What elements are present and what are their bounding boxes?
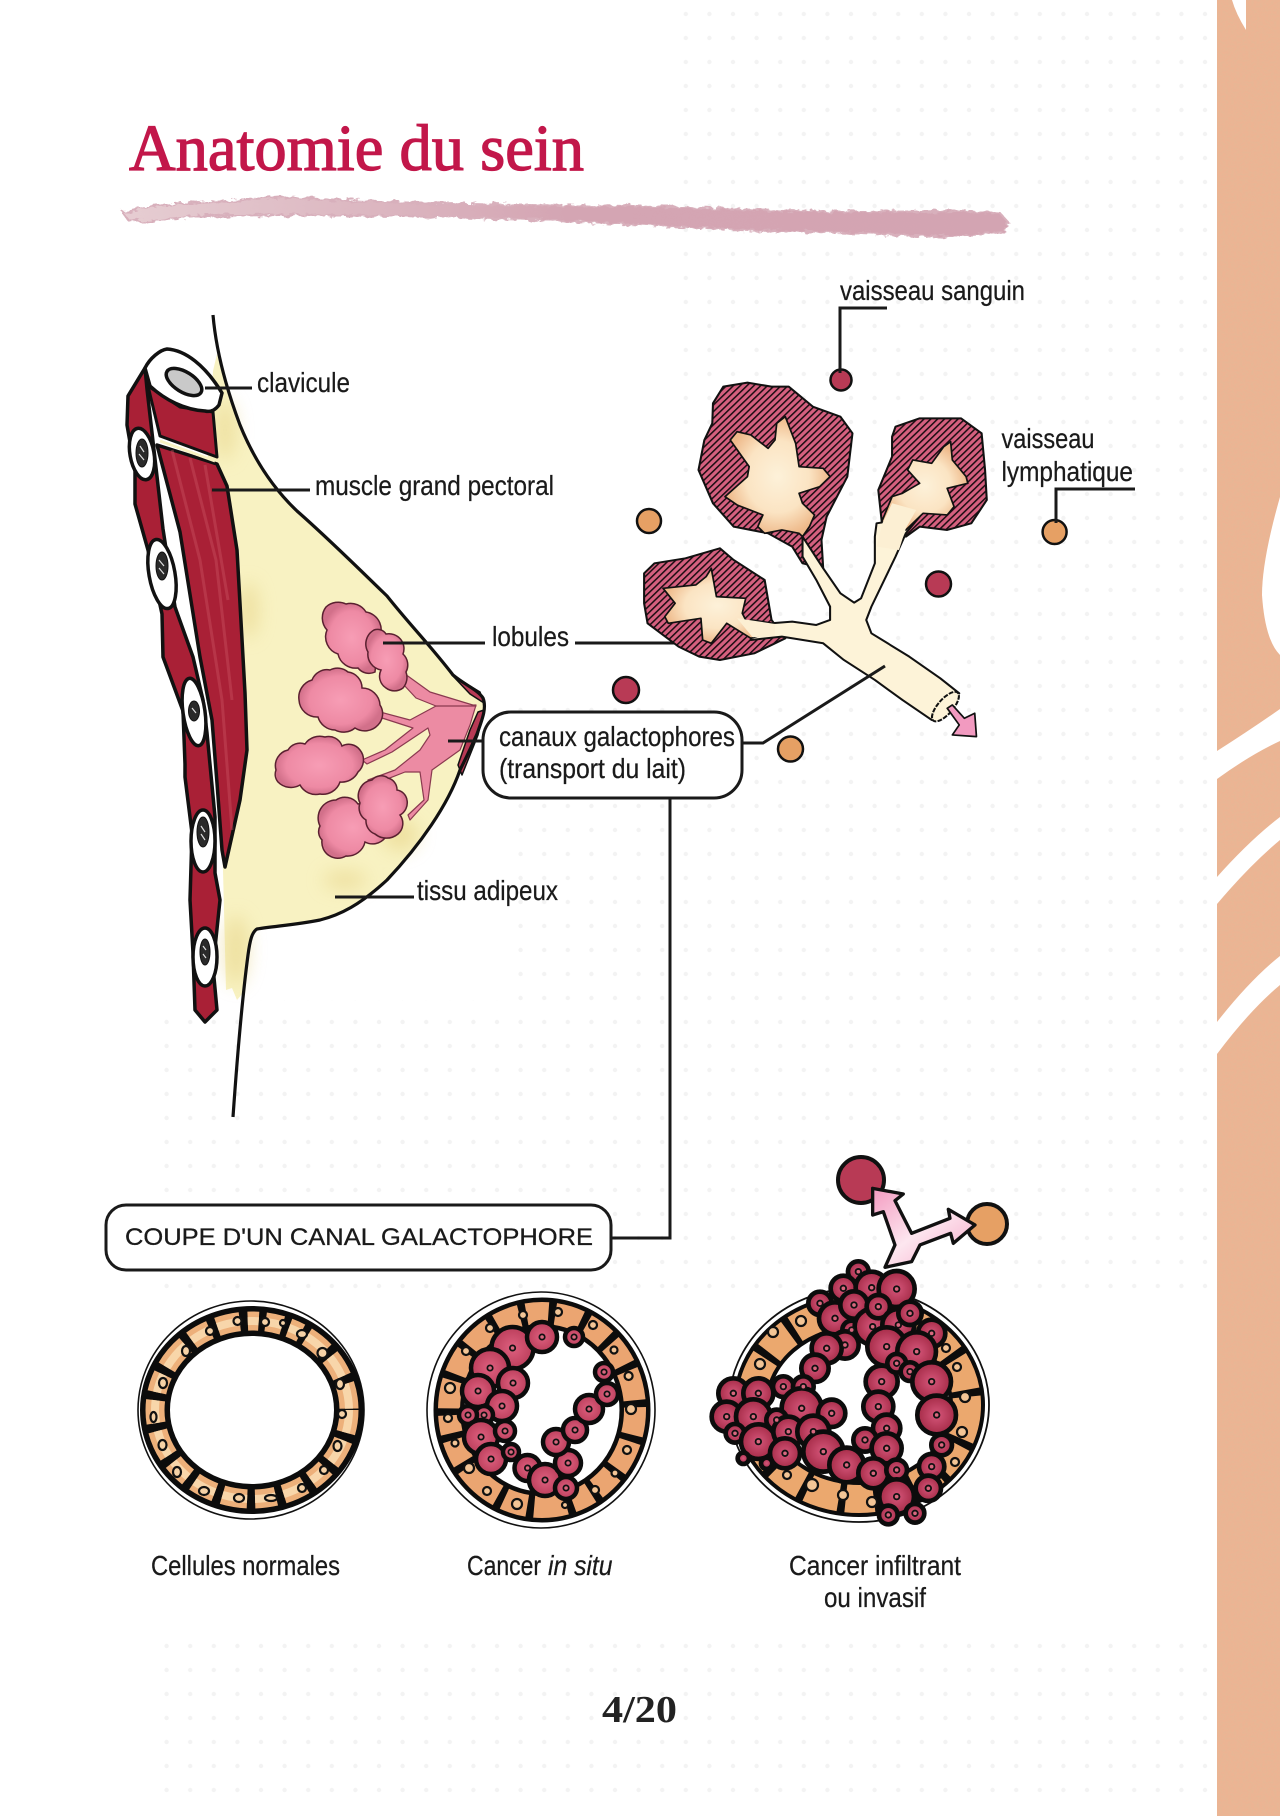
caption: invasive: ou invasif [824, 1582, 926, 1613]
decorative side band [1217, 0, 1280, 1816]
nipple [452, 675, 484, 775]
skin outline [213, 315, 484, 1117]
fascia line [160, 441, 215, 461]
invading red cells [459, 1322, 618, 1499]
label: vaisseau sanguin [840, 275, 1025, 373]
blood vessel dots [613, 370, 951, 703]
invading red cells [712, 1261, 956, 1524]
label: vaisseau lymphatique: vaisseau [1002, 423, 1094, 454]
caption: in situ: Cancer [467, 1550, 541, 1581]
lobules [275, 602, 408, 858]
label: vaisseau lymphatique: lymphatique [1002, 456, 1133, 487]
blood vessel target [838, 1157, 884, 1203]
label: lobules: lobules [492, 621, 569, 652]
lobule C [644, 548, 785, 660]
pectoral muscle [148, 386, 247, 867]
label: tissu adipeux: tissu adipeux [417, 875, 558, 906]
arrow: milk flow [947, 705, 976, 737]
breast anatomy illustration [126, 315, 484, 1117]
nuclei [150, 1317, 346, 1502]
caption: in situ: in situ [548, 1550, 613, 1581]
callout: canaux galactophores [448, 666, 885, 1238]
lymph vessel target [967, 1204, 1007, 1244]
heading: coupe d'un canal galactophore [106, 1205, 611, 1270]
cross-section: cancer in situ [427, 1292, 655, 1528]
label: clavicule: clavicule [257, 367, 350, 398]
cross-section: normal cells [138, 1301, 364, 1519]
clavicle [145, 349, 222, 411]
lobule cavities [663, 417, 968, 643]
callout: canaux galactophores: canaux galactophores [499, 721, 735, 752]
title brush stroke [123, 197, 1008, 237]
nuclei of orange cells [444, 1308, 636, 1509]
nuclei of orange cells [755, 1316, 970, 1507]
duct end [927, 688, 963, 725]
duct joins [737, 503, 916, 637]
intercostal muscles [127, 368, 220, 1022]
lobule B [878, 418, 987, 537]
caption: invasive [789, 1550, 961, 1613]
page number: 4/20 [602, 1689, 677, 1731]
fat shading [215, 400, 418, 985]
duct and lobules detail [644, 383, 987, 737]
fatty tissue [205, 354, 484, 1000]
callout: canaux galactophores: (transport du lait) [499, 753, 686, 784]
caption: normal cells: Cellules normales [151, 1550, 340, 1581]
duct tree [751, 517, 959, 720]
label: vaisseau sanguin: vaisseau sanguin [840, 275, 1025, 306]
heading: coupe d'un canal galactophore: COUPE D'UN CANAL GALACTOPHORE [125, 1224, 593, 1251]
label: vaisseau lymphatique [1002, 423, 1135, 523]
ribs [126, 426, 217, 986]
milk ducts [362, 705, 476, 820]
arrow: spreading cells [873, 1188, 975, 1267]
lobule A [699, 383, 852, 568]
title: Anatomie du sein [129, 112, 584, 185]
cross-section: invasive cancer [712, 1157, 1007, 1524]
caption: in situ [467, 1550, 613, 1581]
caption: invasive: Cancer infiltrant [789, 1550, 961, 1581]
vessels [613, 370, 1067, 762]
label: muscle grand pectoral: muscle grand pectoral [315, 470, 554, 501]
lymph vessel dots [637, 509, 1067, 762]
